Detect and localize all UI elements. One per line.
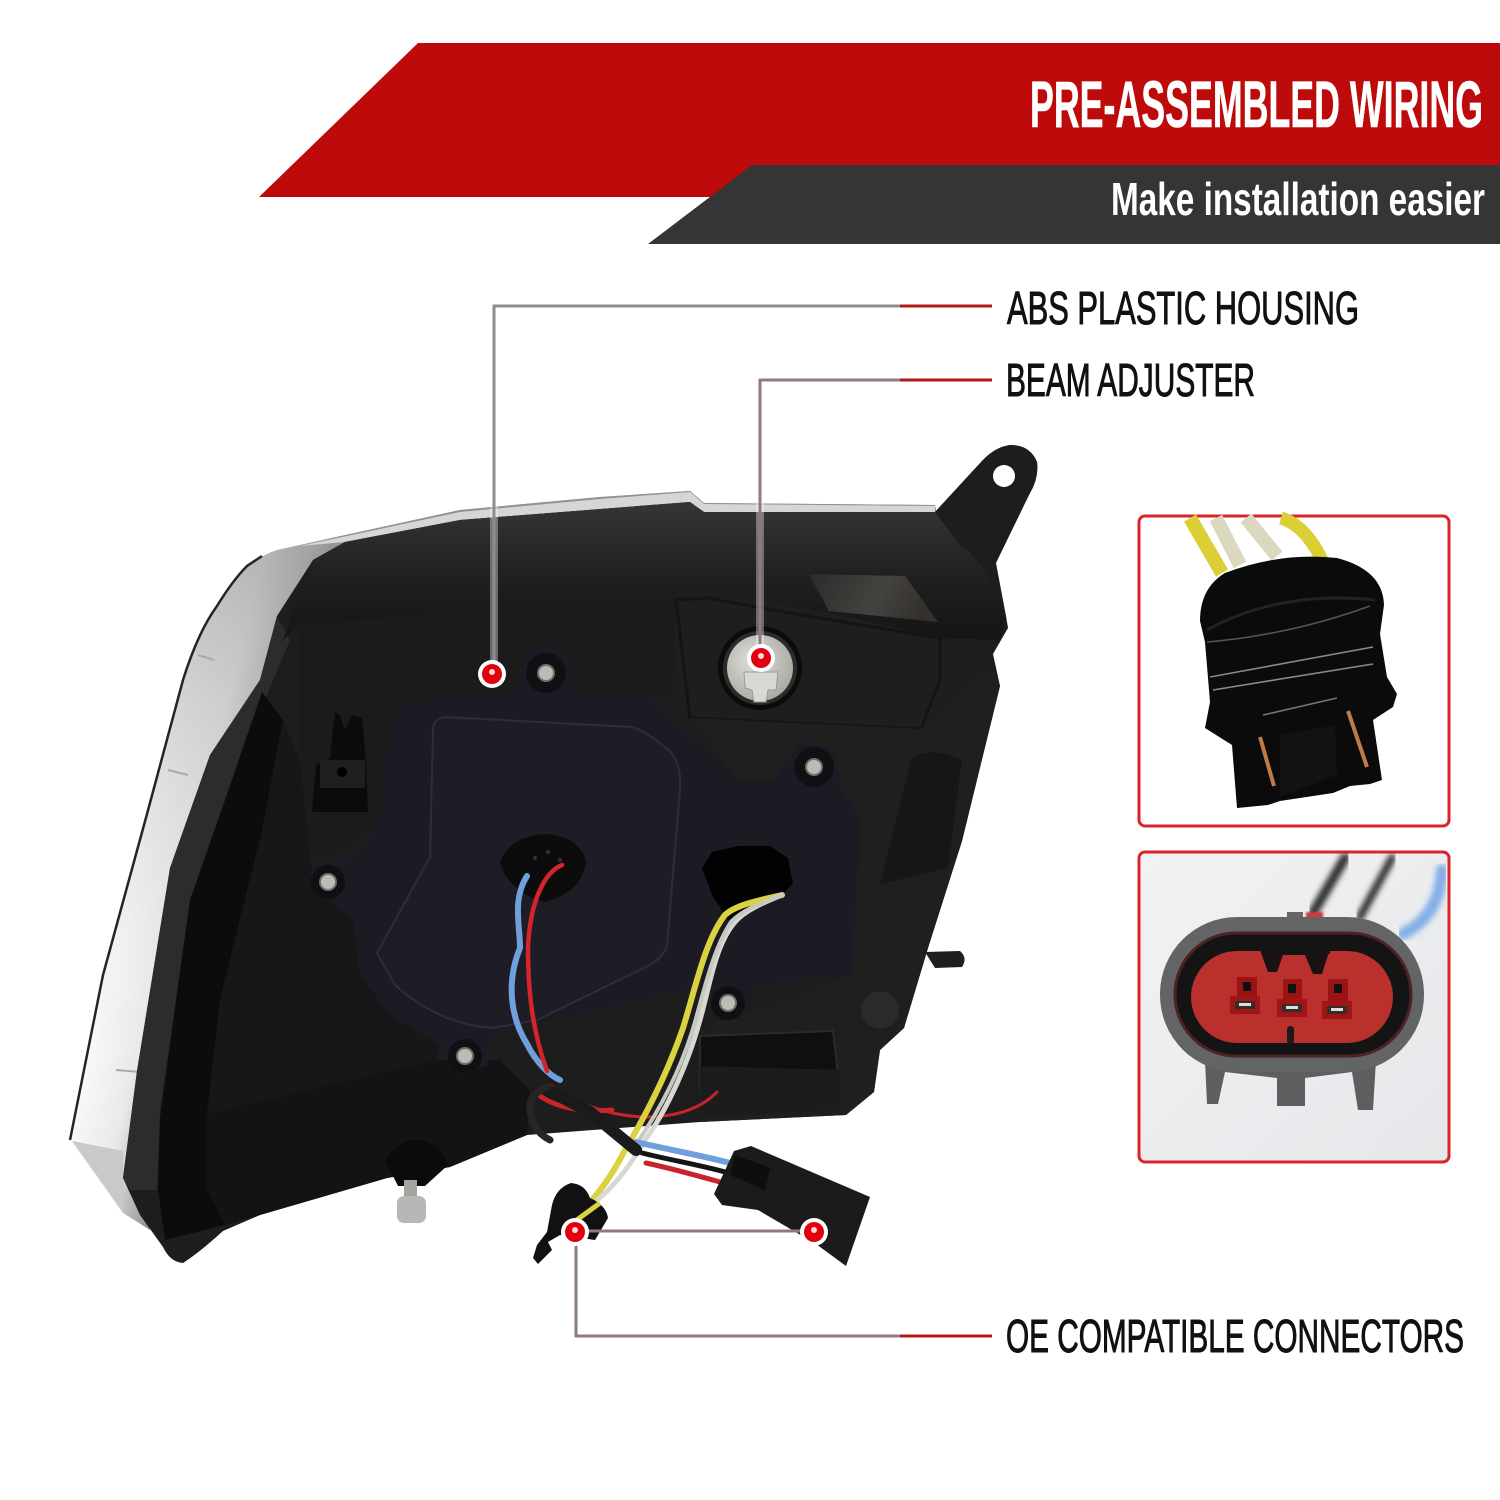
top lens strip [300, 492, 935, 546]
lower right housing [690, 665, 1000, 1122]
housing body [123, 445, 1037, 1263]
connector highlights [1207, 598, 1375, 715]
wire grommet [500, 834, 586, 902]
callout: beam adjuster: BEAM ADJUSTER [1006, 354, 1255, 406]
wires [512, 865, 782, 1218]
header banner: dark [648, 165, 1500, 244]
callout: beam adjuster [747, 354, 1255, 672]
connector blade [1280, 725, 1337, 797]
lower left block [207, 1060, 530, 1225]
clear lens [70, 491, 940, 1230]
inner black band [158, 692, 283, 1240]
connector wires [1313, 858, 1442, 934]
rim edge [123, 616, 290, 1190]
wiring connector small [533, 1183, 608, 1264]
rear cover plate [310, 640, 860, 1074]
clip [312, 712, 368, 812]
bulb opening [702, 846, 793, 920]
raised cover section [377, 717, 680, 1028]
panel: three-pin connector detail [1139, 852, 1449, 1162]
lower circular boss [861, 991, 899, 1029]
callout: OE compatible connectors [561, 1218, 1464, 1362]
top housing strip [283, 502, 1006, 640]
callout: ABS plastic housing [478, 282, 1359, 688]
left recessed panel [300, 600, 676, 860]
red insert [1191, 951, 1393, 1043]
copper terminals [1260, 711, 1367, 786]
panel: bulb connector detail [1139, 516, 1449, 826]
insert notches [1260, 950, 1330, 974]
header banner: red [259, 43, 1500, 197]
terminal pins [1230, 977, 1352, 1019]
connector wires [1190, 518, 1322, 573]
centre slot [1287, 1026, 1294, 1044]
tab [925, 951, 965, 968]
housing sticker label [809, 574, 938, 622]
lower tray [700, 1031, 841, 1098]
headlight product [70, 445, 1037, 1266]
screw bosses [311, 653, 834, 1073]
beam adjuster screw [718, 626, 802, 710]
side bump [880, 752, 962, 884]
connector shell [1160, 917, 1424, 1072]
wiring loom [548, 1090, 636, 1150]
wiring connector large [714, 1146, 870, 1266]
mounting screws [320, 665, 822, 1064]
top tabs [1287, 912, 1303, 922]
connector legs [1205, 1060, 1376, 1110]
mounting ear [935, 445, 1037, 560]
connector body [1200, 557, 1397, 808]
lower adjuster post [385, 1140, 448, 1223]
right recessed panel [676, 592, 976, 740]
